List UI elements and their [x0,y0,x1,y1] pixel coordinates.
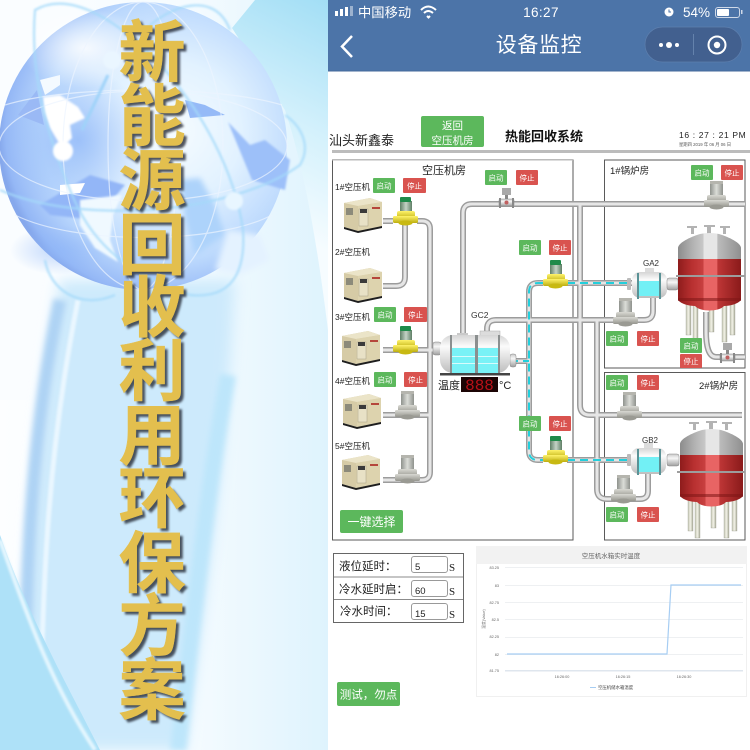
icon: boiler 1 return valve [613,298,638,326]
pipe network [383,204,745,499]
icon: compressor 5 [342,455,380,490]
compressor labels [335,182,370,451]
button: start boiler 2 top: 启动 [610,378,625,388]
company name: 汕头新鑫泰 [329,133,394,148]
button: stop mid lower: 停止 [552,418,568,428]
button: start boiler 2 return: 启动 [610,510,625,520]
title [118,16,189,729]
icon: boiler 2 steam valve [617,392,642,420]
button: start top valve: 启动 [488,172,504,182]
icon: boiler 2 return valve [611,475,636,504]
panel: phone screenshot [328,0,750,706]
panel: app header bar [328,0,750,72]
button: start boiler 1 top: 启动 [694,168,710,178]
icon: valve 4 [395,391,420,420]
icon: valve mid upper [543,260,568,288]
setting: cooling water time: 冷水时间： [340,605,398,618]
panel: boiler room 1 frame [604,160,745,368]
legend [590,684,634,691]
carrier text: 中国移动 [358,5,411,20]
LED temperature display: 888 [465,377,494,395]
icon: compressor 3 [342,331,380,366]
y-axis ticks [489,566,499,673]
setting: cooling water time [340,604,455,621]
button: start 4 [374,372,396,387]
panel: boiler room 2 frame [604,372,745,540]
icon: valve 3 [393,326,418,354]
title: 用 [118,399,186,474]
y-axis ticks: 82.75 [489,601,499,605]
button: start boiler 1 return: 启动 [610,334,625,344]
icon: compressor 2 [344,268,382,303]
button: stop 3: 停止 [408,310,423,320]
icon: boiler 1 steam valve [704,181,729,210]
icon: signal bars [335,6,353,16]
button: start 1 [373,178,395,193]
button: stop 1: 停止 [407,180,422,190]
setting: level delay: 液位延时： [339,559,396,573]
y-axis ticks: 83 [495,584,499,588]
x-axis ticks: 16:26:15 [616,675,630,679]
button: stop mid lower [549,416,571,431]
x-axis ticks: 16:26:30 [677,675,691,679]
button: start boiler 1 top [691,165,713,180]
button: select all: 一键选择 [347,515,396,529]
button: stop boiler 2 return [637,507,659,522]
label GB2: GB2 [642,436,659,445]
button: stop boiler 1 top: 停止 [724,168,740,178]
icon: compressor 1 [344,198,382,233]
chart title: 空压机水箱实时温度 [582,551,641,560]
button: test, do not click: 测试，勿点 [340,688,397,702]
tank GB2 [627,443,679,475]
button: stop boiler 1 top [721,165,743,180]
button: select all [340,510,403,533]
title: 回 [118,209,186,284]
compressor labels: 2#空压机 [335,247,370,257]
button: start boiler 1 drain [680,338,702,353]
icon: boiler 1 gauge [720,343,735,363]
y-axis ticks: 82.25 [489,635,499,639]
heading: boiler room 1: 1#锅炉房 [610,165,649,177]
icon: boiler 2 [677,421,745,538]
button: start boiler 2 return [606,507,628,522]
tank GA2 [627,268,678,299]
icon: battery [716,8,742,18]
button: start 3: 启动 [378,310,393,320]
clock: 16 : 27 : 21 PM [679,130,746,140]
x-axis ticks [555,675,691,679]
setting: level delay: S [449,562,455,574]
panel: compressor room frame [332,159,573,540]
panel: left background with globe [0,0,328,750]
button: start top valve [485,170,507,185]
button: start boiler 1 drain: 启动 [684,340,699,350]
title: 能 [118,80,186,155]
system heading: 热能回收系统 [505,129,583,144]
icon: valve 5 [395,455,420,484]
icon: globe [0,2,305,300]
y-axis ticks: 81.75 [489,669,499,673]
setting: cooling water start delay: 60 [415,586,426,597]
label GA2: GA2 [643,259,660,268]
button: stop boiler 1 return [637,331,659,346]
button: return to compressor room: 空压机房 [432,134,474,147]
icon: alarm [664,8,674,16]
compressor labels: 1#空压机 [335,182,370,192]
button: stop top valve [516,170,538,185]
compressor labels: 5#空压机 [335,441,370,451]
y-axis title: 温度(Value) [481,608,486,629]
icon: valve mid lower [543,436,568,464]
setting: level delay [339,556,455,574]
line chart: compressor water tank temperature [476,546,747,696]
button: stop 3 [404,307,427,322]
title: 方 [118,590,186,665]
page title: 设备监控 [496,34,582,57]
icon: top gauge valve [499,188,514,208]
setting: cooling water start delay: S [449,586,455,598]
button: stop boiler 1 drain: 停止 [684,356,699,366]
button: stop 4 [404,372,427,387]
tank GC2 [433,331,516,376]
temperature label: 温度 [438,378,460,392]
button: stop mid upper: 停止 [552,242,568,252]
button: stop 1 [403,178,426,193]
title: 收 [118,271,186,346]
button: stop mid upper [549,240,571,255]
label GC2: GC2 [471,310,489,320]
setting: level delay: 5 [415,562,420,573]
button: start boiler 2 top [606,375,628,390]
button: start mid lower: 启动 [522,418,538,428]
title: 利 [118,335,186,410]
setting: cooling water start delay [339,580,455,598]
title: 环 [118,462,186,537]
cyan water flow [510,283,633,460]
icon: valve 1 [393,197,418,226]
button: return to compressor room [421,116,484,147]
button: start 1: 启动 [376,180,392,190]
icon: back chevron [342,36,352,57]
button: stop boiler 1 return: 停止 [640,334,656,344]
battery percent: 54% [683,5,710,20]
compressor labels: 3#空压机 [335,312,370,322]
heading: boiler room 2: 2#锅炉房 [699,380,738,392]
button: start 4: 启动 [378,374,393,384]
y-axis ticks: 83.25 [489,566,499,570]
setting: cooling water start delay: 冷水延时启： [339,583,408,596]
icon: boiler 1 [676,225,745,342]
status time: 16:27 [523,5,559,20]
icon: compressor 4 [343,394,381,429]
button: start mid upper [519,240,541,255]
button: start boiler 1 return [606,331,628,346]
button: start 3 [374,307,396,322]
setting: cooling water time: 15 [415,609,426,620]
title: 源 [118,144,186,219]
button: test, do not click [337,682,400,706]
button: stop top valve: 停止 [520,172,535,182]
button: stop boiler 2 return: 停止 [640,510,656,520]
heading: compressor room: 空压机房 [422,163,466,177]
button: stop boiler 2 top [637,375,659,390]
title: 案 [118,654,186,729]
x-axis ticks: 16:26:00 [555,675,569,679]
button: stop boiler 2 top: 停止 [640,378,656,388]
y-axis ticks: 82 [495,653,499,657]
button: stop boiler 1 drain [680,354,702,368]
temperature line [507,585,741,654]
setting: cooling water time: S [449,609,455,621]
title: 保 [118,527,186,602]
button: start mid upper: 启动 [522,242,538,252]
capsule menu [645,27,742,62]
button: start mid lower [519,416,541,431]
y-axis ticks: 82.5 [492,618,499,622]
legend: 空压机储水箱温度 [598,684,634,691]
panel: delay settings table [334,554,464,622]
degree unit: °C [499,380,511,392]
icon: wifi [421,6,436,18]
title: 新 [118,16,186,91]
button: return to compressor room: 返回 [442,120,463,132]
date: 星期四 2019 年 06 月 06 日 [679,141,731,148]
button: stop 4: 停止 [408,374,423,384]
compressor labels: 4#空压机 [335,376,370,386]
